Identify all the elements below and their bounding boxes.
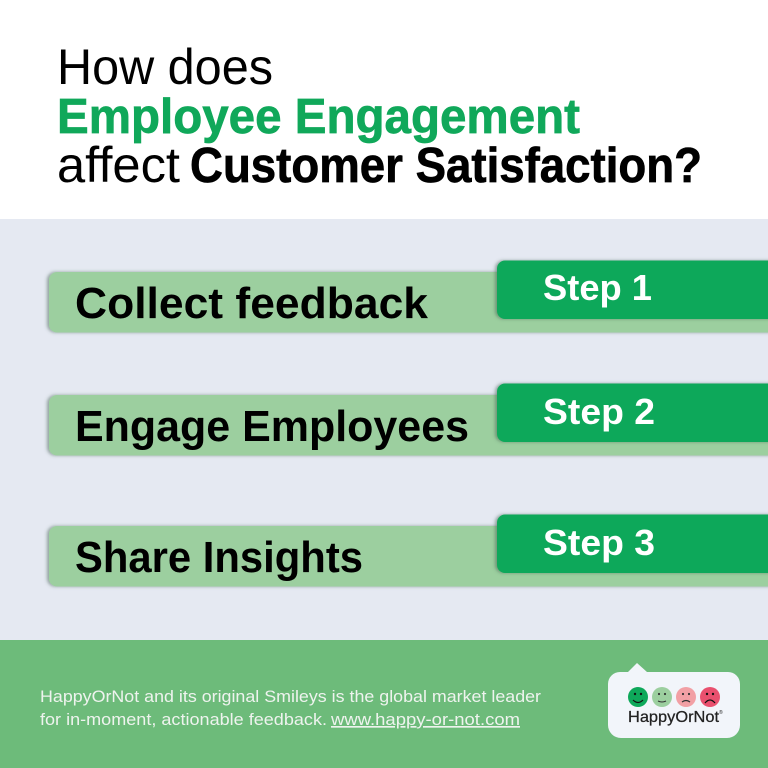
footer text — [40, 688, 542, 729]
footer text: HappyOrNot and its original Smileys is the global market leader — [40, 688, 542, 706]
step 2 row — [49, 384, 768, 456]
panel: steps background — [0, 219, 768, 640]
logo badge — [608, 663, 740, 738]
step 2 bar — [49, 395, 768, 456]
step 2 label: Engage Employees — [75, 402, 469, 451]
step 1 bar — [49, 272, 768, 332]
panel: footer — [0, 640, 768, 768]
speech bubble — [608, 663, 740, 738]
step 1 row — [49, 260, 768, 332]
step 3 tab — [497, 514, 768, 573]
step 1 tab text: Step 1 — [543, 267, 652, 308]
title: affect — [57, 137, 180, 193]
icon: happy smiley — [628, 687, 648, 707]
step 3 bar — [49, 526, 768, 586]
step 2 tab — [497, 384, 768, 442]
icon: unhappy smiley — [700, 687, 720, 707]
icon: fairly happy smiley — [652, 687, 672, 707]
footer text: www.happy-or-not.com — [330, 711, 520, 729]
title: Customer Satisfaction? — [190, 139, 702, 193]
logo wordmark: HappyOrNot — [628, 709, 720, 726]
step 3 tab text: Step 3 — [543, 522, 655, 563]
title — [57, 39, 702, 193]
step 3 label: Share Insights — [75, 533, 363, 582]
registered mark: ® — [719, 709, 723, 716]
step 1 label: Collect feedback — [75, 279, 429, 328]
title: How does — [57, 39, 273, 95]
step 1 tab — [497, 260, 768, 319]
step 2 tab text: Step 2 — [543, 391, 655, 432]
footer text: for in-moment, actionable feedback. — [40, 711, 327, 729]
step 3 row — [49, 514, 768, 586]
icon: fairly unhappy smiley — [676, 687, 696, 707]
title: Employee Engagement — [57, 90, 580, 144]
